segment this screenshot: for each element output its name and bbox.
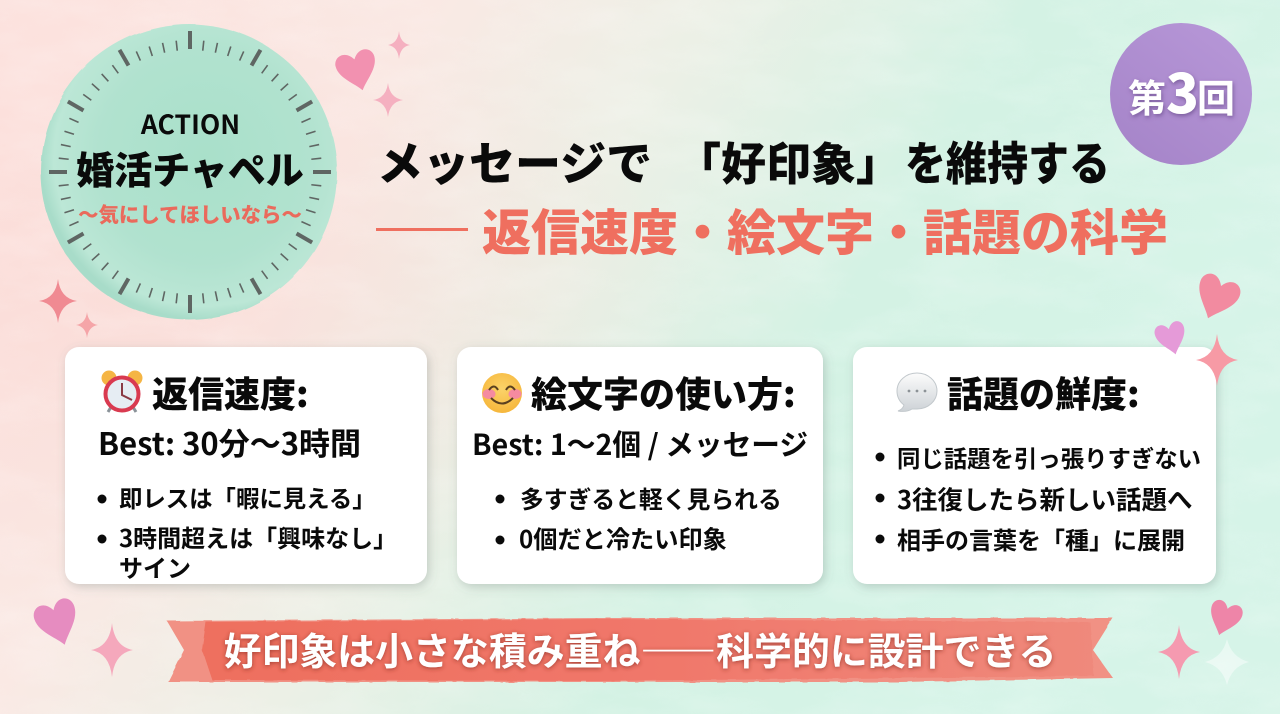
- banner ribbon: [167, 618, 1113, 682]
- heading: 返信速度:: [152, 366, 309, 418]
- clock badge: [41, 24, 337, 320]
- icon: alarm clock: [102, 370, 142, 412]
- icon: smiling face: [482, 373, 522, 413]
- title line 2: 返信速度・絵文字・話題の科学: [482, 194, 1168, 265]
- title line 1: メッセージで: [377, 128, 652, 194]
- bullet list: [876, 440, 1201, 556]
- clock ticks: [49, 31, 331, 313]
- heading: 話題の鮮度:: [947, 366, 1140, 418]
- panel: emoji usage: [457, 347, 823, 584]
- badge subtitle: 〜気にしてほしいなら〜: [78, 198, 302, 228]
- episode label: 回: [1197, 68, 1235, 123]
- icon: large pink heart right: [1189, 271, 1244, 326]
- title line 1: を維持する: [905, 128, 1110, 194]
- panel: reply speed: [65, 347, 427, 584]
- title line 1: [377, 128, 1110, 194]
- icon: sparkle bottom left: [91, 623, 133, 677]
- icon: speech bubble: [897, 373, 937, 411]
- bullet list: サイン: [119, 549, 191, 584]
- bullet list: 即レスは「暇に見える」: [119, 480, 376, 514]
- title line 1: 「好印象」: [676, 128, 901, 193]
- episode label: 第: [1128, 68, 1166, 123]
- icon: heart bottom left: [31, 596, 85, 651]
- bullet list: 相手の言葉を「種」に展開: [897, 521, 1185, 556]
- badge title: 婚活チャペル: [76, 140, 304, 195]
- banner text: 好印象は小さな積み重ね——科学的に設計できる: [224, 621, 1056, 676]
- heading: 絵文字の使い方:: [531, 366, 796, 418]
- bullet list: [98, 480, 397, 584]
- icon: sparkle bottom right: [1158, 625, 1200, 679]
- badge label: ACTION: ACTION: [140, 103, 240, 142]
- best value: Best: 30分〜3時間: [98, 419, 361, 464]
- panel: topic freshness: [853, 347, 1216, 584]
- icon: sparkle top right of badge: [388, 31, 410, 59]
- icon: heart bottom right: [1204, 598, 1245, 640]
- bullet list: 同じ話題を引っ張りすぎない: [897, 440, 1201, 474]
- icon: sparkle lower left small: [76, 312, 98, 338]
- icon: sparkle on card corner: [1196, 334, 1238, 386]
- bullet list: 3往復したら新しい話題へ: [897, 480, 1193, 517]
- icon: sparkle below heart: [373, 83, 403, 117]
- bullet list: 3時間超えは「興味なし」: [119, 519, 397, 554]
- icon: pink heart top: [333, 47, 382, 95]
- icon: sparkle lower left large: [39, 279, 77, 323]
- episode label: 3: [1166, 50, 1199, 129]
- bullet list: 0個だと冷たい印象: [519, 520, 727, 555]
- icon: purple heart right: [1153, 319, 1190, 358]
- best value: Best: 1〜2個 / メッセージ: [472, 423, 808, 464]
- bullet list: [496, 480, 782, 555]
- icon: white sparkle bottom right: [1205, 639, 1249, 685]
- clock face: [41, 24, 337, 320]
- episode badge: [1110, 23, 1252, 165]
- bullet list: 多すぎると軽く見られる: [520, 480, 782, 515]
